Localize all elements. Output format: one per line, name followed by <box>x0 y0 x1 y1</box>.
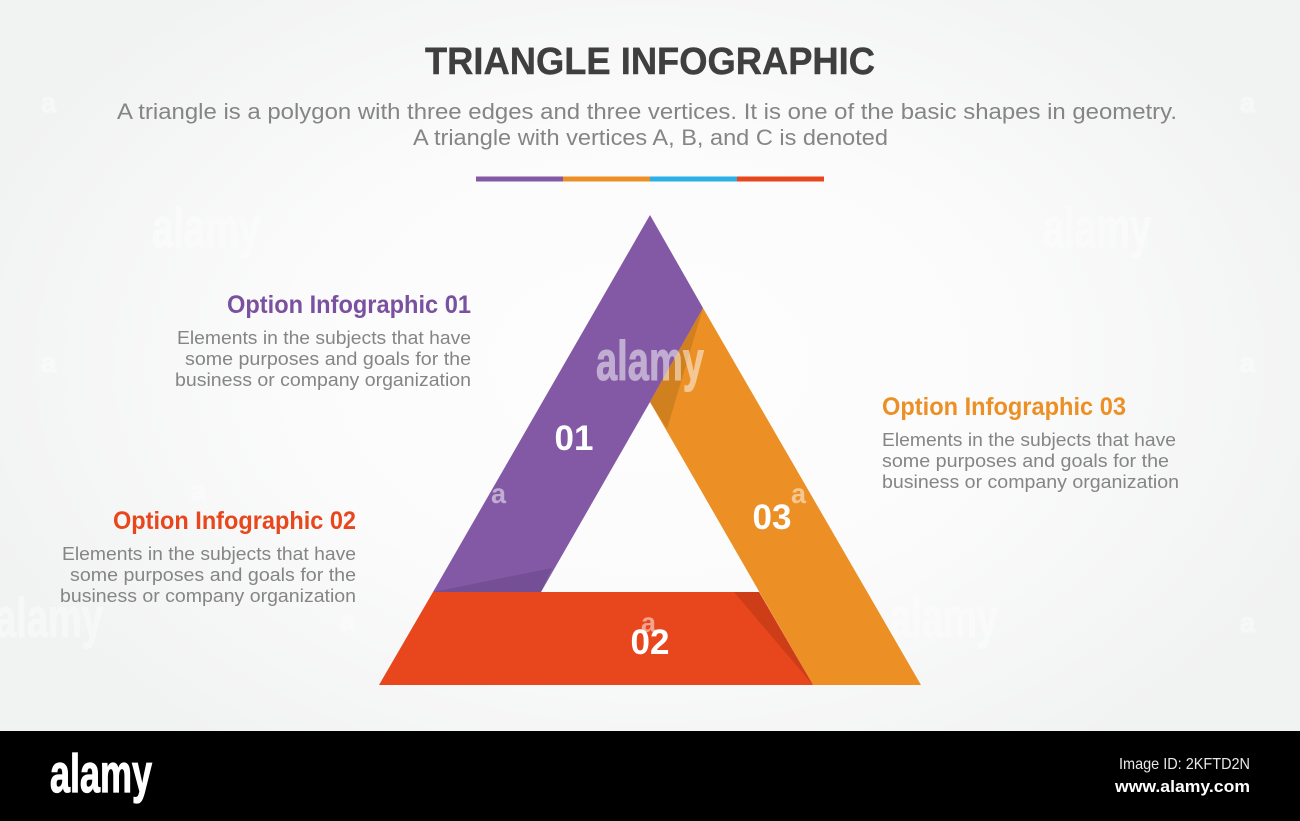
text block: option 02 <box>60 507 356 606</box>
triangle diagram <box>379 215 921 685</box>
fold shadow on purple <box>433 568 552 592</box>
background watermarks: a <box>191 475 206 506</box>
background watermarks: alamy <box>152 196 260 259</box>
body: option 01: Elements in the subjects that have <box>177 328 471 348</box>
body: option 01: some purposes and goals for the <box>185 349 471 369</box>
background watermarks: a <box>340 605 355 636</box>
subtitle: A triangle is a polygon with three edges and three vertices. It is one of the basic shapes in geometry. <box>117 99 1177 124</box>
body: option 02 <box>60 544 356 606</box>
heading: option 02: Option Infographic 02 <box>113 507 356 535</box>
background watermarks: alamy <box>890 586 998 649</box>
fold shadow on red <box>734 592 813 685</box>
segment 01: purple band <box>433 215 703 592</box>
background watermarks: a <box>1240 87 1255 118</box>
title: TRIANGLE INFOGRAPHIC <box>425 41 875 83</box>
segment 02: red band <box>379 592 813 685</box>
background watermarks: a <box>41 87 56 118</box>
body: option 02: some purposes and goals for the <box>70 565 356 585</box>
footer logo: alamy <box>50 744 152 804</box>
subtitle: A triangle with vertices A, B, and C is denoted <box>413 125 888 150</box>
number 03: 03 <box>753 498 791 537</box>
heading: option 03: Option Infographic 03 <box>882 393 1126 421</box>
fold shadow on orange <box>650 308 703 429</box>
image id: Image ID: 2KFTD2N <box>1119 756 1250 773</box>
background watermarks: a <box>41 347 56 378</box>
colour divider bar <box>476 176 824 182</box>
small watermarks on bands: a <box>491 478 506 509</box>
body: option 01 <box>175 328 471 390</box>
body: option 03: some purposes and goals for the <box>882 451 1169 471</box>
body: option 03: Elements in the subjects that have <box>882 430 1176 450</box>
body: option 03 <box>882 430 1179 492</box>
segment 03: orange band <box>650 308 921 685</box>
footer bar <box>0 731 1300 821</box>
subtitle <box>117 99 1177 150</box>
body: option 02: Elements in the subjects that have <box>62 544 356 564</box>
heading: option 01: Option Infographic 01 <box>227 291 471 319</box>
website: www.alamy.com <box>1114 777 1250 796</box>
body: option 02: business or company organization <box>60 586 356 606</box>
number 02: 02 <box>631 623 669 662</box>
small watermarks on bands: a <box>791 478 806 509</box>
background watermarks: alamy <box>1043 196 1151 259</box>
small watermarks on bands: a <box>641 607 656 638</box>
number 01: 01 <box>555 419 593 458</box>
background watermarks <box>0 87 1255 649</box>
background watermarks: a <box>1240 607 1255 638</box>
text block: option 03 <box>882 393 1179 492</box>
body: option 01: business or company organization <box>175 370 471 390</box>
small watermarks on bands <box>491 478 806 638</box>
body: option 03: business or company organization <box>882 472 1179 492</box>
background watermarks: a <box>1240 347 1255 378</box>
text block: option 01 <box>175 291 471 390</box>
centre watermark: alamy <box>596 329 704 392</box>
